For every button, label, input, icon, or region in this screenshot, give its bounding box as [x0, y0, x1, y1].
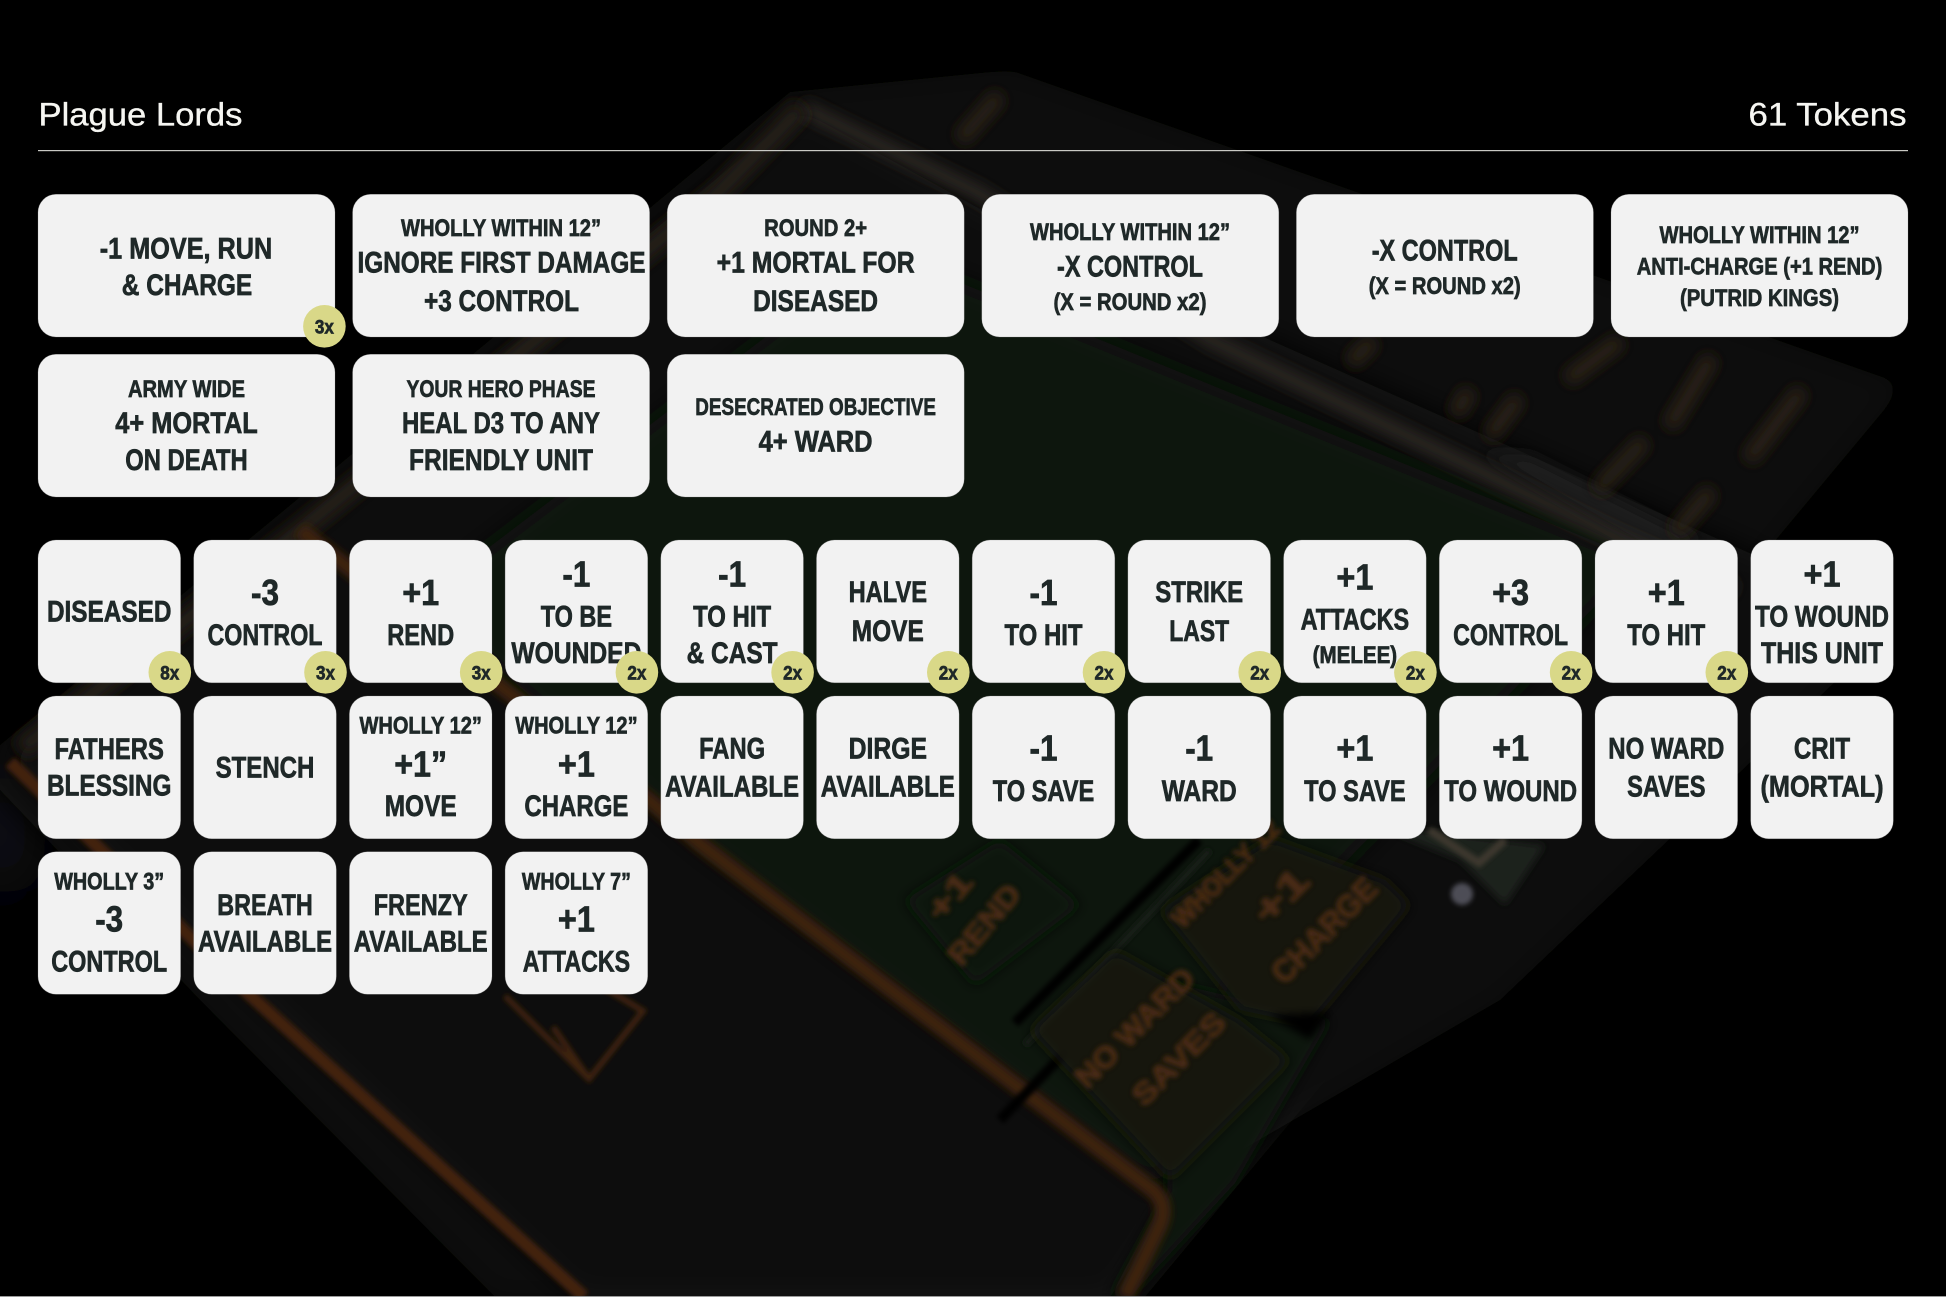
- token: diseased (8x): [38, 540, 191, 694]
- token: desecrated objective 4+ ward: 4+ WARD: [759, 426, 873, 459]
- token: ignore first damage: [353, 194, 650, 337]
- count badge 3x: [460, 651, 503, 694]
- token: fathers blessing: [38, 696, 181, 839]
- token: -1 ward: [1128, 696, 1270, 839]
- token: wholly 7 +1 attacks: WHOLLY 7”: [522, 868, 631, 895]
- count badge 2x: [1238, 651, 1281, 694]
- count badge 2x: [1394, 651, 1437, 694]
- title: Plague Lords: Plague Lords: [38, 96, 242, 132]
- tray engraved token words: +1: [1245, 860, 1318, 933]
- token: +1 to wound: [1439, 696, 1582, 839]
- token: wholly 3 -3 control: [38, 852, 181, 994]
- token: heal d3 to any friendly unit: FRIENDLY UNIT: [409, 444, 593, 477]
- count badge 3x: [304, 651, 347, 694]
- token: +1 to hit (2x): TO HIT: [1627, 619, 1705, 652]
- token: +1 to hit (2x): +1: [1648, 572, 1685, 613]
- count badge 2x: 2x: [627, 662, 647, 684]
- token: +1 attacks melee (2x): (MELEE): [1313, 642, 1397, 669]
- token: crit (mortal): (MORTAL): [1760, 771, 1884, 804]
- count badge 2x: [771, 651, 814, 694]
- token: -1 to be wounded (2x): -1: [562, 554, 590, 595]
- token: -3 control (3x): CONTROL: [208, 619, 322, 652]
- token: wholly 3 -3 control: WHOLLY 3”: [54, 868, 164, 895]
- count badge 2x: 2x: [1250, 662, 1269, 684]
- token: anti-charge putrid kings: ANTI-CHARGE (+1 REND): [1637, 253, 1882, 280]
- token: anti-charge putrid kings: [1611, 194, 1908, 337]
- token: diseased (8x): DISEASED: [47, 596, 171, 629]
- count badge 2x: 2x: [1406, 662, 1425, 684]
- token: -1 to save: TO SAVE: [993, 775, 1094, 808]
- token: +1 to save: +1: [1336, 728, 1373, 769]
- token: crit (mortal): [1751, 696, 1893, 839]
- token: -1 to hit (2x): -1: [1030, 572, 1058, 613]
- token: strike last (2x): [1128, 540, 1281, 694]
- token: breath available: BREATH: [217, 889, 313, 922]
- token: +1 to hit (2x): [1595, 540, 1748, 694]
- token: wholly 7 +1 attacks: +1: [558, 899, 595, 940]
- token: halve move (2x): [816, 540, 970, 694]
- token: anti-charge putrid kings: WHOLLY WITHIN 12”: [1660, 222, 1860, 249]
- token: fang available: FANG: [699, 732, 765, 765]
- token: frenzy available: AVAILABLE: [354, 926, 488, 959]
- token: desecrated objective 4+ ward: [667, 354, 964, 497]
- token: wholly within 12 -X control: (X = ROUND x2): [1054, 289, 1206, 316]
- token: no ward saves: SAVES: [1627, 771, 1706, 804]
- token: -X control: [1296, 194, 1593, 337]
- count badge 3x: [303, 305, 346, 348]
- count badge 2x: [927, 651, 970, 694]
- token: +3 control (2x): CONTROL: [1453, 619, 1568, 652]
- token: heal d3 to any friendly unit: YOUR HERO PHASE: [406, 376, 596, 403]
- token: +1 rend (3x): +1: [402, 572, 439, 613]
- tray engraved token words: +1: [919, 864, 980, 927]
- token: fathers blessing: BLESSING: [47, 770, 171, 803]
- token: fathers blessing: FATHERS: [54, 733, 164, 766]
- token: +1 to wound this unit: [1751, 540, 1893, 683]
- token: +1 rend (3x): REND: [387, 619, 454, 652]
- token: -1 to hit (2x): TO HIT: [1004, 619, 1082, 652]
- token: -1 move, run & charge (3x): [38, 194, 346, 348]
- token: +1 to wound this unit: THIS UNIT: [1761, 637, 1883, 670]
- token: strike last (2x): STRIKE: [1155, 576, 1243, 609]
- count badge 3x: 3x: [472, 662, 491, 684]
- token: no ward saves: NO WARD: [1608, 732, 1724, 765]
- token: wholly 12 +1 charge: CHARGE: [524, 790, 628, 823]
- token: +1 to wound this unit: TO WOUND: [1755, 601, 1889, 634]
- token: +3 control (2x): [1439, 540, 1592, 694]
- token: heal d3 to any friendly unit: HEAL D3 TO ANY: [402, 407, 600, 440]
- token: -3 control (3x): [194, 540, 347, 694]
- token: dirge available: AVAILABLE: [821, 771, 955, 804]
- token: wholly 12 +1 move: +1”: [394, 744, 447, 785]
- token: stench: STENCH: [216, 751, 314, 784]
- token: -1 to be wounded (2x): WOUNDED: [511, 637, 641, 670]
- token: frenzy available: FRENZY: [374, 889, 468, 922]
- token: +1 to save: TO SAVE: [1304, 775, 1406, 808]
- token: -X control: -X CONTROL: [1372, 235, 1518, 268]
- token: -1 to hit & cast (2x): TO HIT: [693, 601, 771, 634]
- token: wholly within 12 -X control: [982, 194, 1279, 337]
- token: wholly within 12 -X control: -X CONTROL: [1057, 251, 1203, 284]
- token: +1 to save: [1284, 696, 1426, 839]
- token: +1 to wound: TO WOUND: [1444, 775, 1577, 808]
- token: wholly within 12 -X control: WHOLLY WITHIN 12”: [1030, 219, 1230, 246]
- token: +1 attacks melee (2x): [1284, 540, 1437, 694]
- token: ignore first damage: WHOLLY WITHIN 12”: [401, 215, 601, 242]
- tray engraved token words: SAVES: [1126, 1006, 1233, 1113]
- token: halve move (2x): HALVE: [849, 576, 927, 609]
- token: no ward saves: [1595, 696, 1738, 839]
- token: -1 to hit & cast (2x): [661, 540, 814, 694]
- token: -1 move, run & charge (3x): -1 MOVE, RUN: [100, 232, 272, 265]
- token: strike last (2x): LAST: [1169, 615, 1229, 648]
- tray engraved token words: WHOLLY 12: [1166, 814, 1286, 934]
- tray engraved token words: NO WARD: [1069, 962, 1202, 1095]
- token: wholly 12 +1 move: WHOLLY 12”: [360, 712, 482, 739]
- token: desecrated objective 4+ ward: DESECRATED OBJECTIVE: [695, 394, 936, 421]
- count badge 2x: [616, 651, 658, 694]
- token: army wide 4+ mortal on death: ARMY WIDE: [128, 376, 245, 403]
- token: +1 mortal for diseased: ROUND 2+: [764, 215, 867, 242]
- token: wholly 3 -3 control: CONTROL: [51, 946, 167, 979]
- token: -1 to save: -1: [1030, 728, 1058, 769]
- token: dirge available: DIRGE: [849, 732, 927, 765]
- token: fang available: AVAILABLE: [665, 771, 799, 804]
- token: wholly 12 +1 move: MOVE: [385, 790, 457, 823]
- token: wholly 12 +1 charge: WHOLLY 12”: [515, 712, 638, 739]
- token: dirge available: [816, 696, 959, 839]
- token: fang available: [661, 696, 803, 839]
- token: army wide 4+ mortal on death: ON DEATH: [125, 444, 248, 477]
- token: crit (mortal): CRIT: [1794, 732, 1850, 765]
- tray engraved token words: [919, 814, 1385, 1113]
- token: army wide 4+ mortal on death: 4+ MORTAL: [115, 407, 258, 440]
- token: -1 ward: -1: [1185, 728, 1213, 769]
- count badge 2x: 2x: [1562, 662, 1581, 684]
- token: -1 to save: [972, 696, 1115, 839]
- count badge 2x: [1550, 651, 1592, 694]
- token: wholly 12 +1 charge: +1: [558, 744, 595, 785]
- token: -3 control (3x): -3: [251, 572, 279, 613]
- count badge 2x: 2x: [1094, 662, 1114, 684]
- token: -1 ward: WARD: [1162, 775, 1237, 808]
- count badge 2x: 2x: [783, 662, 802, 684]
- count badge 2x: [1706, 651, 1748, 694]
- token count: 61 Tokens: 61 Tokens: [1748, 96, 1906, 132]
- token: +1 mortal for diseased: [667, 194, 964, 337]
- token: stench: [194, 696, 336, 839]
- token: wholly 7 +1 attacks: [505, 852, 648, 994]
- tray engraved token words: CHARGE: [1264, 870, 1385, 991]
- token: +1 to wound: +1: [1492, 728, 1529, 769]
- token: +1 rend (3x): [349, 540, 503, 694]
- token: +1 to wound this unit: +1: [1804, 554, 1840, 595]
- count badge 3x: 3x: [316, 662, 335, 684]
- token: wholly 12 +1 move: [349, 696, 492, 839]
- token: -1 to be wounded (2x): [505, 540, 658, 694]
- token: ignore first damage: +3 CONTROL: [424, 285, 579, 318]
- token: -1 to hit & cast (2x): -1: [718, 554, 746, 595]
- token: wholly 7 +1 attacks: ATTACKS: [523, 946, 630, 979]
- token: breath available: AVAILABLE: [198, 926, 332, 959]
- count badge 8x: [148, 651, 191, 694]
- count badge 8x: 8x: [160, 662, 179, 684]
- token: +1 attacks melee (2x): +1: [1336, 556, 1373, 597]
- token: frenzy available: [349, 852, 492, 994]
- token: army wide 4+ mortal on death: [38, 354, 335, 497]
- token: -1 to hit (2x): [972, 540, 1125, 694]
- count badge 2x: 2x: [1717, 662, 1736, 684]
- token: halve move (2x): MOVE: [852, 615, 924, 648]
- token: wholly 3 -3 control: -3: [95, 899, 123, 940]
- token: +1 mortal for diseased: DISEASED: [753, 285, 878, 318]
- token: ignore first damage: IGNORE FIRST DAMAGE: [358, 246, 646, 279]
- token: +1 mortal for diseased: +1 MORTAL FOR: [717, 246, 915, 279]
- count badge 2x: 2x: [939, 662, 958, 684]
- token: heal d3 to any friendly unit: [353, 354, 650, 497]
- token: anti-charge putrid kings: (PUTRID KINGS): [1680, 285, 1839, 312]
- count badge 3x: 3x: [315, 316, 334, 338]
- token: wholly 12 +1 charge: [505, 696, 648, 839]
- token: -1 to hit & cast (2x): & CAST: [687, 637, 778, 670]
- tray engraved token words: REND: [942, 878, 1028, 972]
- count badge 2x: [1083, 651, 1125, 694]
- token: breath available: [194, 852, 336, 994]
- token: -X control: (X = ROUND x2): [1369, 273, 1521, 300]
- token: -1 move, run & charge (3x): & CHARGE: [122, 269, 252, 302]
- token: -1 to be wounded (2x): TO BE: [541, 601, 612, 634]
- token: +1 attacks melee (2x): ATTACKS: [1301, 603, 1409, 636]
- token: +3 control (2x): +3: [1492, 572, 1529, 613]
